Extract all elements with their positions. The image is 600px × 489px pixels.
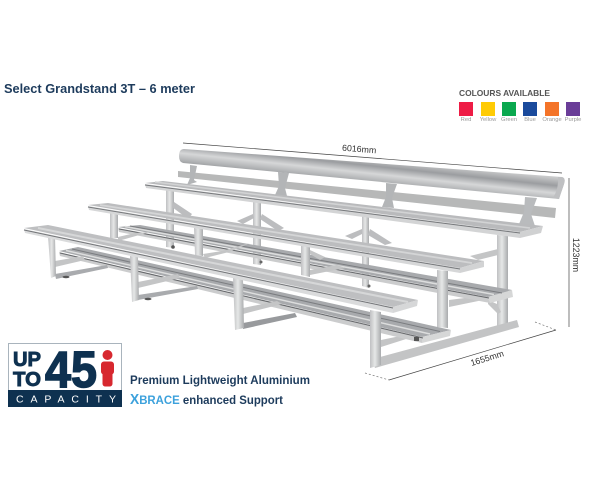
- swatch: yellow: Yellow: [480, 117, 497, 123]
- middle legs: [110, 213, 448, 328]
- swatch: purple: Purple: [565, 117, 581, 123]
- dimension: depth 1655mm: [365, 322, 556, 380]
- title: Select Grandstand 3T – 6 meter: [4, 82, 195, 96]
- grandstand illustration: [24, 149, 565, 368]
- capacity number: 45: [45, 341, 97, 398]
- second footrest: [118, 225, 513, 303]
- front seat: [24, 225, 418, 313]
- feature: xbrace enhanced support: XBRACE enhanced Support: [130, 392, 283, 408]
- back rail with supports: [178, 149, 565, 226]
- up to label: TO: [13, 369, 41, 391]
- third footrest: [59, 247, 451, 343]
- up to label: UP: [13, 349, 41, 371]
- front legs: [48, 236, 381, 368]
- second seat: [88, 203, 484, 273]
- icon: person: [101, 350, 114, 387]
- swatch: orange: Orange: [542, 117, 562, 123]
- capacity band: CAPACITY: [16, 394, 116, 406]
- swatch: blue: Blue: [524, 117, 536, 123]
- dimension: width 6016mm: 6016mm: [342, 143, 377, 155]
- rear and middle frame: [166, 190, 508, 347]
- capacity badge: [8, 341, 122, 407]
- swatch: red: Red: [461, 117, 471, 123]
- top seat: [145, 181, 543, 238]
- dimension: width 6016mm: [183, 143, 562, 173]
- legend heading: COLOURS AVAILABLE: [459, 89, 551, 98]
- swatch: green: Green: [501, 117, 517, 123]
- colours available legend: [459, 89, 581, 123]
- up to label: [13, 349, 41, 391]
- dimension: height 1223mm: 1223mm: [571, 238, 581, 272]
- base runners: [55, 256, 519, 368]
- feature: premium lightweight aluminium: Premium Lightweight Aluminium: [130, 373, 310, 387]
- dimension: depth 1655mm: 1655mm: [469, 348, 505, 368]
